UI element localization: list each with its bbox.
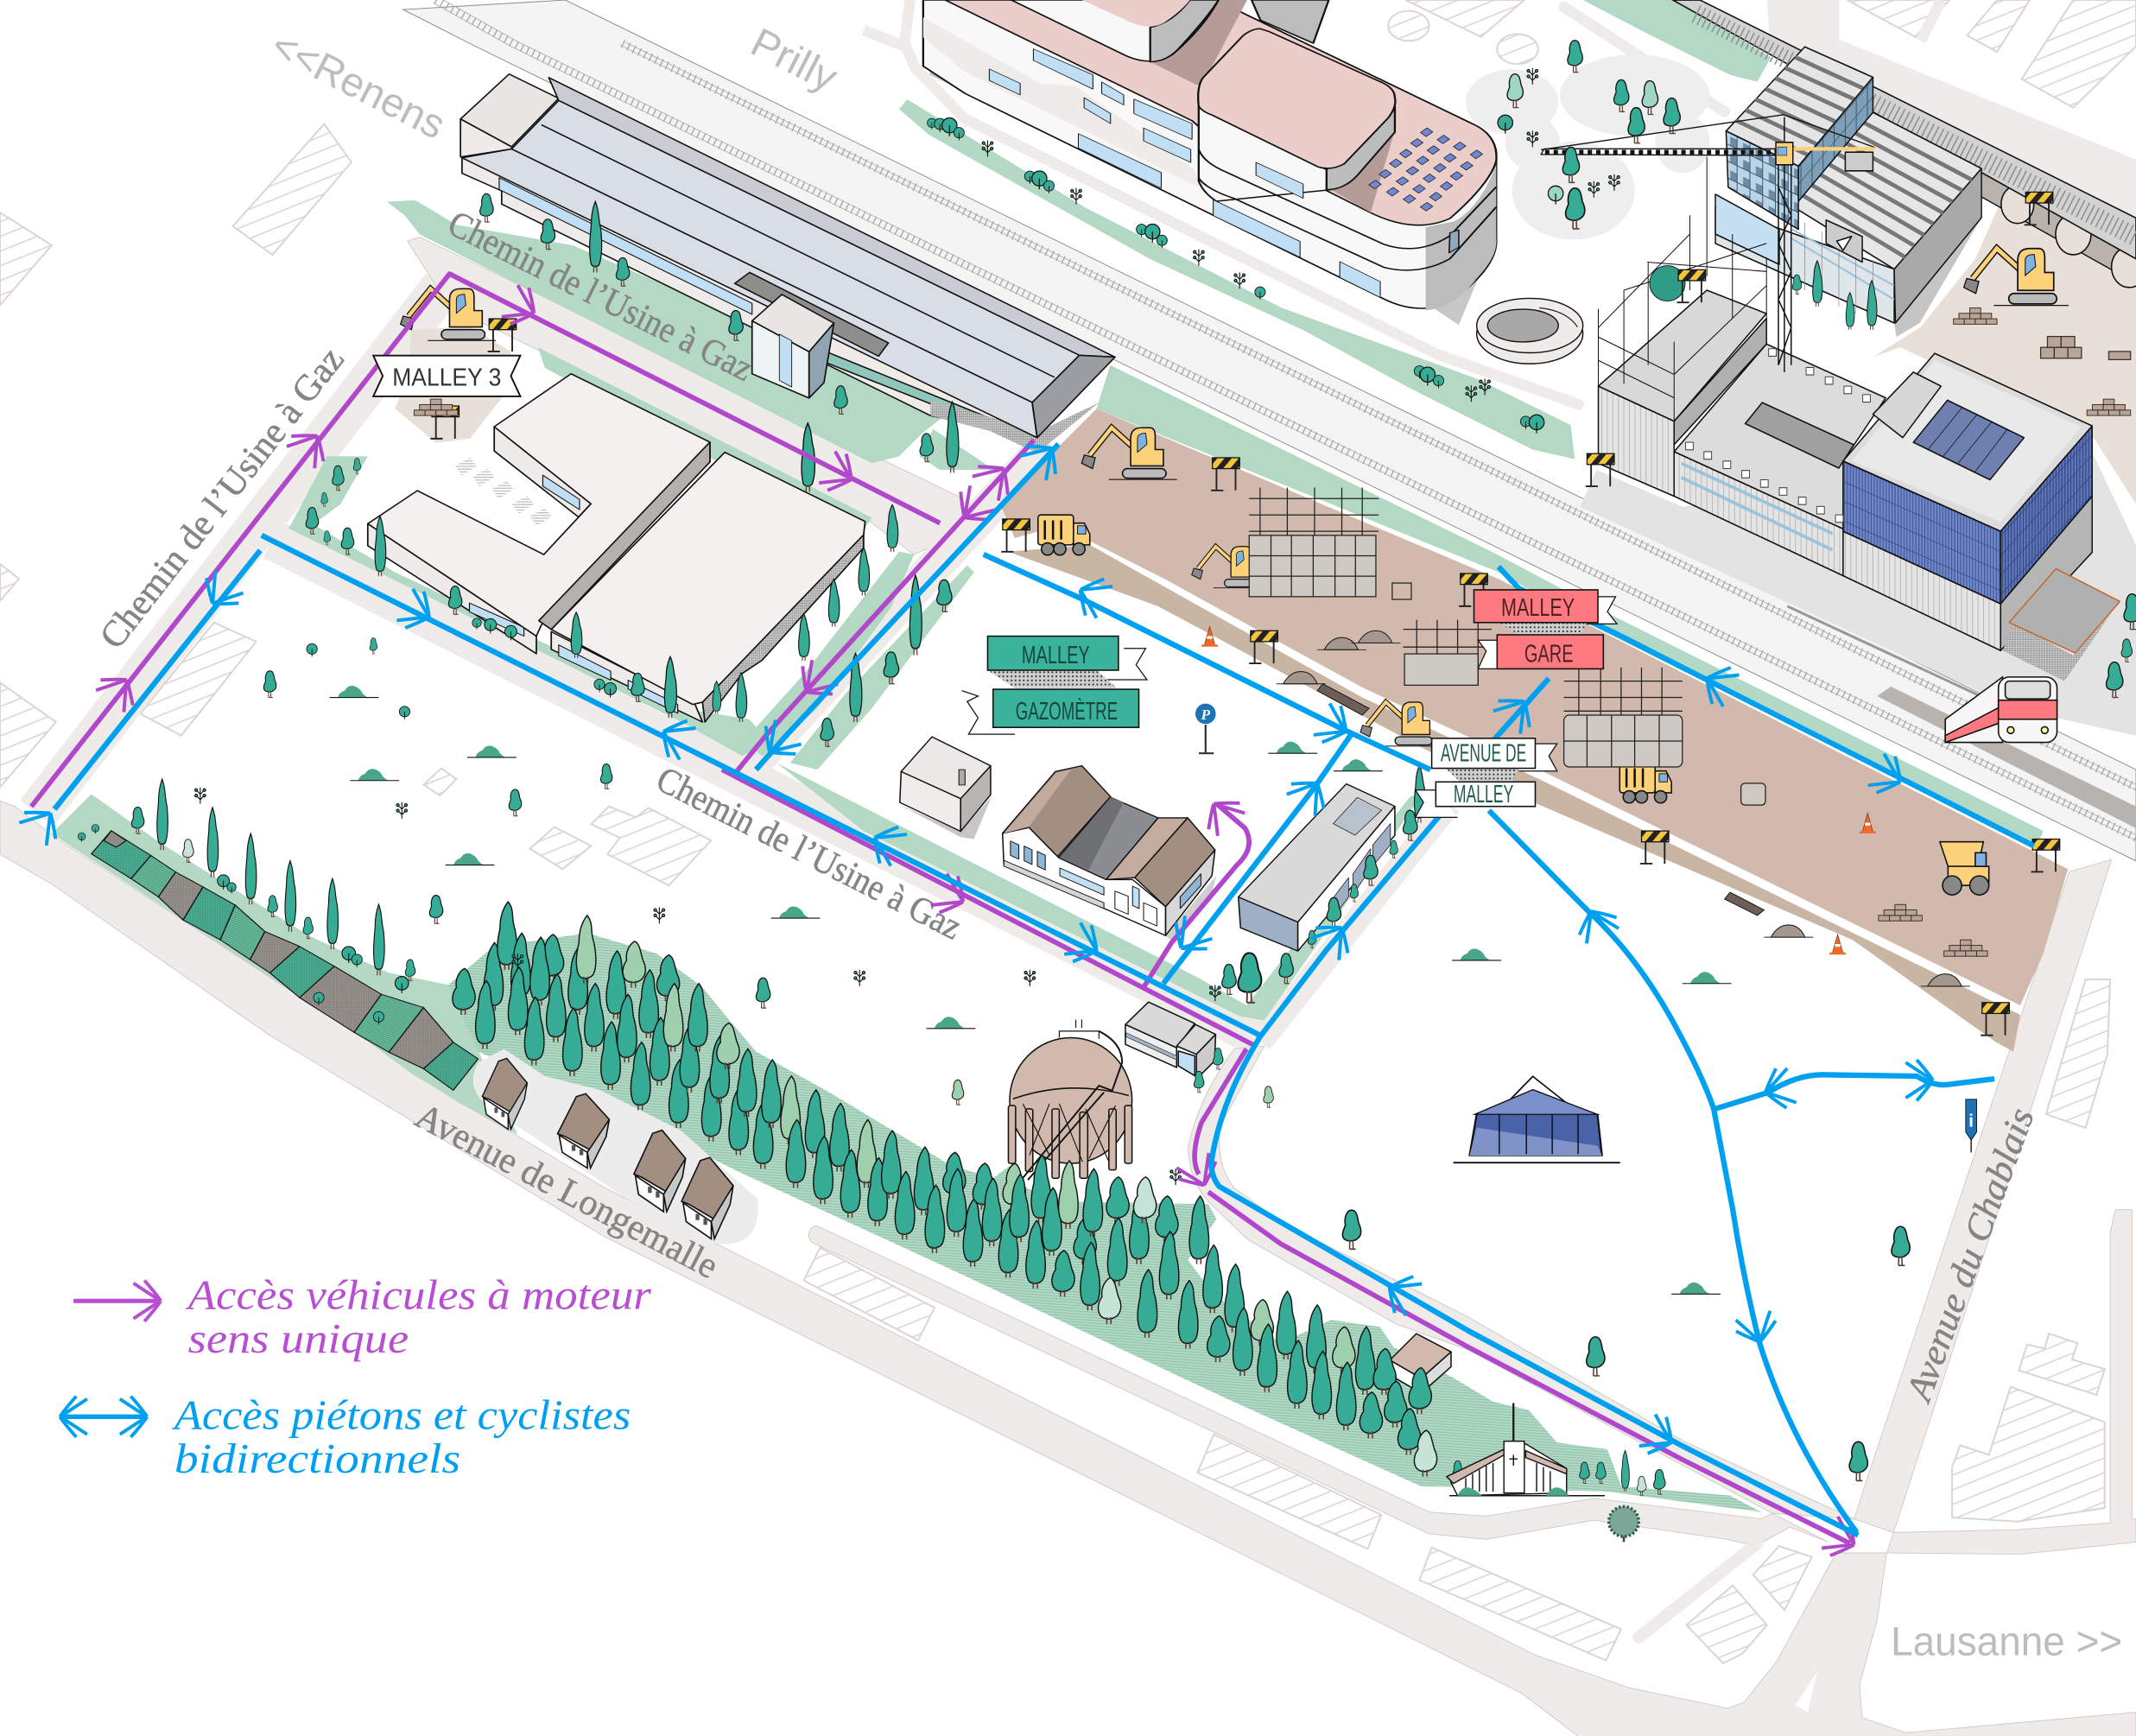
sign: Avenue de Malley: MALLEY (1454, 781, 1513, 808)
sign: Avenue de Malley: AVENUE DE (1441, 740, 1526, 768)
houses (482, 1058, 733, 1239)
road names: Chemin de l’Usine à Gaz (92, 339, 352, 656)
green verges (288, 0, 2136, 1020)
construction site equipment (401, 192, 2131, 1036)
sign: Malley Gare (1474, 590, 1617, 668)
gardens (92, 831, 479, 1090)
route lines: blue pedestrian and cycle access (17, 434, 2034, 1535)
building complex: ground (1581, 449, 2136, 736)
legend: vehicle access (73, 1271, 652, 1362)
road names: Avenue du Chablais (1898, 1103, 2043, 1409)
legend: vehicle access: Accès véhicules à moteur (185, 1271, 652, 1319)
forest (453, 902, 1437, 1477)
icon: information sign (1966, 1099, 1976, 1152)
city names: Lausanne >> (1891, 1619, 2122, 1664)
parking hatch marks (455, 458, 552, 526)
church (1447, 1403, 1605, 1496)
icon: parking sign: P (1200, 706, 1210, 723)
city names: <<Renens (264, 22, 453, 149)
legend: pedestrian and cycle access: Accès piétons et cyclistes (172, 1391, 631, 1438)
sprigs (195, 68, 1619, 1185)
road names: Chemin de l’Usine à Gaz (650, 759, 968, 947)
icon: parking sign (1195, 704, 1216, 753)
building: gazometre hall group (899, 737, 1395, 951)
sign: Malley Gare: GARE (1524, 641, 1574, 668)
grey tree clearing near crane (1466, 54, 1709, 240)
building: station (460, 74, 1115, 453)
bushes (330, 686, 1732, 1294)
city names: Prilly (744, 20, 845, 101)
round pavilion (1477, 298, 1583, 364)
legend: vehicle access: sens unique (188, 1315, 409, 1362)
gasometer and small buildings (1008, 1002, 1451, 1393)
route lines: purple vehicle access (31, 274, 1863, 1563)
circus tent (1454, 1076, 1620, 1163)
sign: Malley 3: MALLEY 3 (392, 364, 501, 391)
road names: Avenue de Longemalle (409, 1095, 725, 1287)
viaduct (1673, 0, 2136, 288)
sign: Malley Gazomètre: MALLEY (1022, 642, 1090, 669)
building complex (1541, 47, 2120, 681)
sign: Avenue de Malley (1416, 738, 1557, 817)
scaffolding blocks (1249, 488, 1765, 805)
construction site ground (395, 198, 2136, 1052)
legend: pedestrian and cycle access (60, 1391, 631, 1482)
sign: Malley Gare: MALLEY (1501, 594, 1575, 622)
legend: pedestrian and cycle access: bidirectionnels (174, 1435, 460, 1482)
forest ground (448, 933, 1761, 1512)
road names: Chemin de l’Usine à Gaz (441, 203, 759, 390)
railway band (403, 0, 2136, 861)
oak tree (1609, 1506, 1638, 1542)
sign: Malley 3 (373, 356, 520, 396)
building: hospital (923, 0, 1499, 325)
train (1945, 677, 2057, 743)
road names (92, 203, 2043, 1409)
garden ground (52, 795, 517, 1135)
building: Malley 3 (368, 374, 865, 722)
sign: Malley Gazomètre: GAZOMÈTRE (1016, 698, 1118, 725)
sign: Malley Gazomètre (961, 637, 1147, 734)
icon: information sign: i (1968, 1111, 1974, 1131)
houses clearing (473, 1049, 757, 1245)
